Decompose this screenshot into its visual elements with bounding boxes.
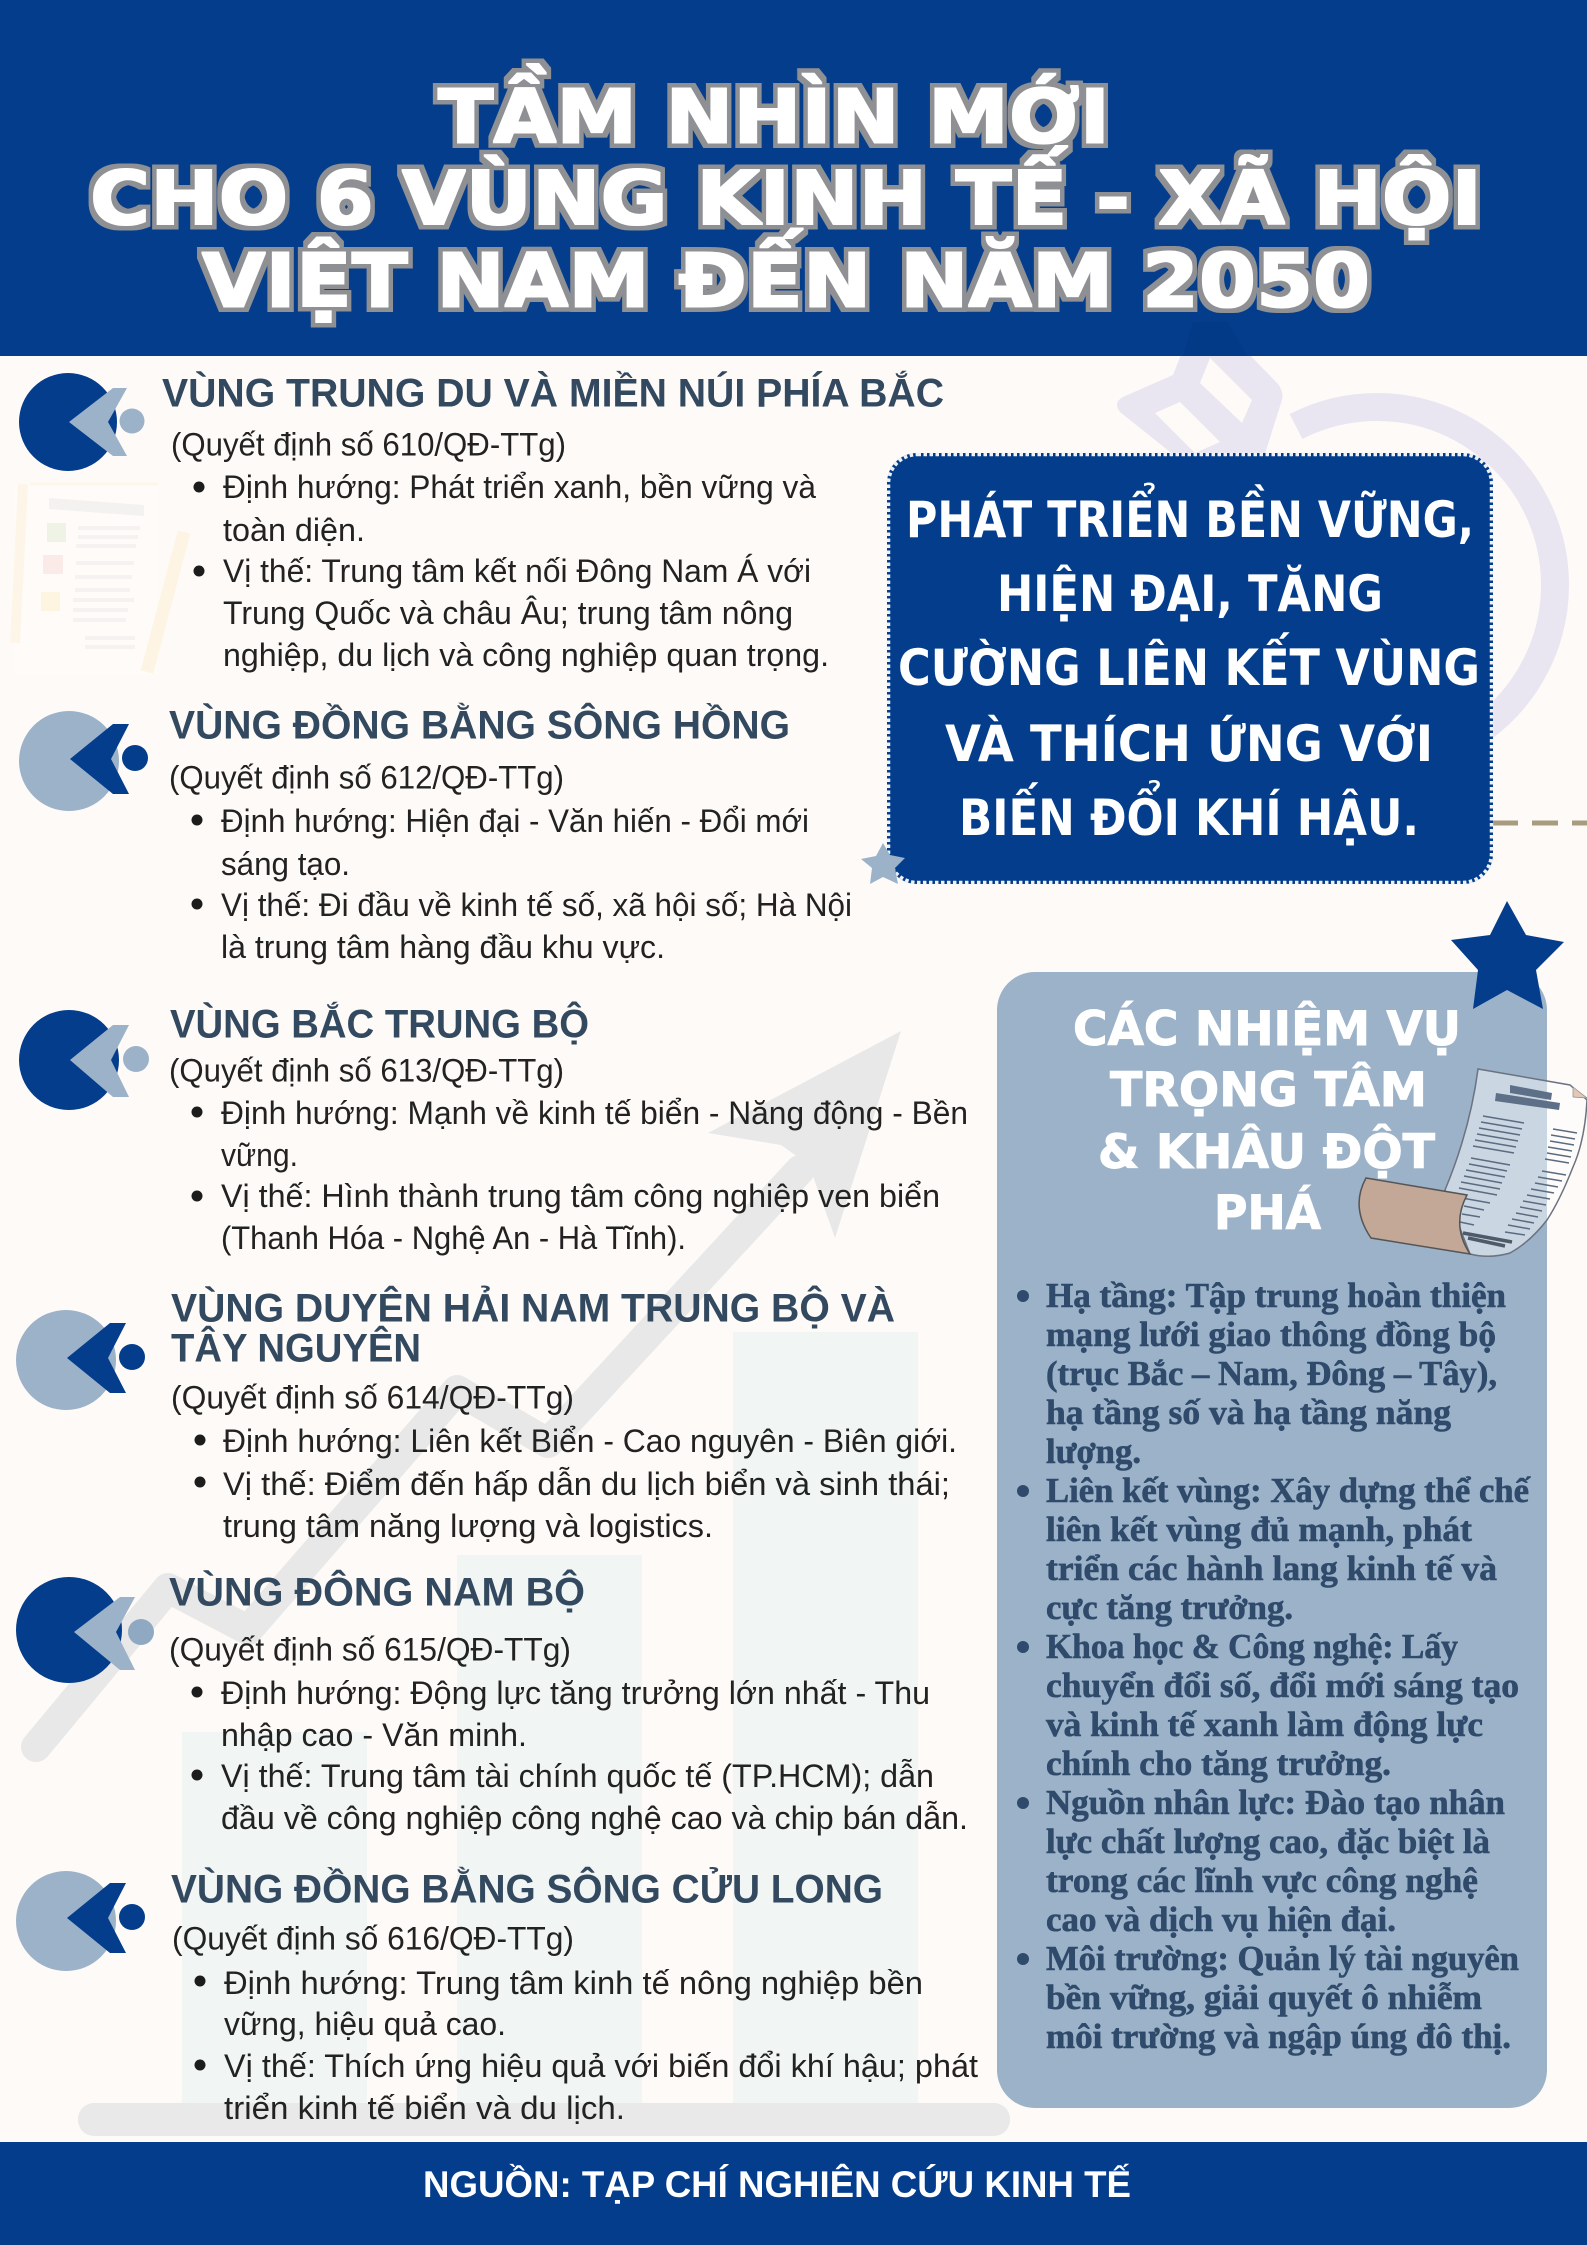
bullet list: section 6: triển kinh tế biển và du lịch.	[224, 2090, 625, 2126]
panel: key tasks	[997, 972, 1587, 2108]
bullet list: section 3	[192, 1095, 968, 1256]
bullet list: section 2	[192, 803, 852, 965]
task list	[1017, 1276, 1531, 2056]
bullet list: section 3: vững.	[221, 1137, 298, 1173]
decision reference: section 4: (Quyết định số 614/QĐ-TTg)	[171, 1380, 574, 1416]
dashed connector	[1492, 820, 1587, 826]
task list: chính cho tăng trưởng.	[1046, 1744, 1391, 1783]
bullet list: section 5	[192, 1675, 968, 1836]
section 6: Đồng bằng sông Cửu Long	[16, 1866, 978, 2126]
task list: (trục Bắc – Nam, Đông – Tây),	[1046, 1354, 1497, 1393]
decision reference: section 1: (Quyết định số 610/QĐ-TTg)	[171, 426, 566, 462]
task list: môi trường và ngập úng đô thị.	[1046, 2017, 1511, 2056]
decision reference: section 2: (Quyết định số 612/QĐ-TTg)	[169, 760, 564, 796]
section 2: Đồng bằng sông Hồng	[19, 702, 852, 965]
bullet list: section 2: là trung tâm hàng đầu khu vực.	[221, 929, 665, 965]
background illustration: target ring and pencil	[1117, 352, 1555, 729]
task list: mạng lưới giao thông đồng bộ	[1046, 1315, 1496, 1354]
header band	[0, 0, 1587, 356]
heading: section 6: VÙNG ĐỒNG BẰNG SÔNG CỬU LONG	[171, 1866, 883, 1912]
decision reference: section 3: (Quyết định số 613/QĐ-TTg)	[169, 1052, 564, 1088]
title: CHO 6 VÙNG KINH TẾ - XÃ HỘI	[90, 145, 1482, 242]
icon: section 5 marker	[16, 1577, 154, 1683]
heading: section 1: VÙNG TRUNG DU VÀ MIỀN NÚI PHÍA BẮC	[162, 370, 944, 416]
footer band	[0, 2142, 1587, 2245]
bullet list: section 4: Định hướng: Liên kết Biển - Cao nguyên - Biên giới.	[223, 1423, 957, 1459]
callout: core vision: BIẾN ĐỔI KHÍ HẬU.	[959, 780, 1419, 847]
task list: cao và dịch vụ hiện đại.	[1046, 1900, 1396, 1939]
icon: section 3 marker	[19, 1010, 149, 1110]
icon: section 4 marker	[16, 1310, 145, 1410]
task list: hạ tầng số và hạ tầng năng	[1046, 1393, 1451, 1432]
heading: section 4: VÙNG DUYÊN HẢI NAM TRUNG BỘ VÀ	[171, 1284, 895, 1330]
bullet list: section 4: trung tâm năng lượng và logistics.	[223, 1508, 713, 1544]
task list: cực tăng trưởng.	[1046, 1588, 1293, 1627]
task list: Môi trường: Quản lý tài nguyên	[1046, 1939, 1519, 1978]
bullet list: section 1: nghiệp, du lịch và công nghiệp quan trọng.	[223, 637, 829, 673]
section 1: Trung du và miền núi phía Bắc	[19, 370, 944, 673]
bullet list: section 1: Định hướng: Phát triển xanh, bền vững và	[223, 469, 816, 505]
callout: core vision: VÀ THÍCH ỨNG VỚI	[945, 714, 1433, 773]
callout: core vision: CƯỜNG LIÊN KẾT VÙNG	[898, 632, 1480, 697]
bullet list: section 2: sáng tạo.	[221, 846, 350, 882]
decision reference: section 6: (Quyết định số 616/QĐ-TTg)	[172, 1920, 574, 1956]
bullet list: section 6: vững, hiệu quả cao.	[224, 2006, 506, 2042]
bullet list: section 5: Vị thế: Trung tâm tài chính quốc tế (TP.HCM); dẫn	[221, 1758, 934, 1794]
task list: Hạ tầng: Tập trung hoàn thiện	[1046, 1276, 1506, 1315]
bullet list: section 3: (Thanh Hóa - Nghệ An - Hà Tĩnh).	[221, 1220, 686, 1256]
heading: section 3: VÙNG BẮC TRUNG BỘ	[170, 1000, 589, 1046]
icon: small star	[861, 843, 905, 884]
heading: section 4	[171, 1284, 895, 1370]
panel heading: TRỌNG TÂM	[1110, 1063, 1427, 1118]
heading: section 2: VÙNG ĐỒNG BẰNG SÔNG HỒNG	[169, 702, 790, 748]
section 5: Đông Nam Bộ	[16, 1568, 968, 1836]
task list: Nguồn nhân lực: Đào tạo nhân	[1046, 1783, 1505, 1822]
heading: section 4: TÂY NGUYÊN	[171, 1324, 421, 1370]
title: VIỆT NAM ĐẾN NĂM 2050	[202, 228, 1370, 324]
bullet list: section 5: đầu về công nghiệp công nghệ cao và chip bán dẫn.	[221, 1800, 968, 1836]
callout: core vision: PHÁT TRIỂN BỀN VỮNG,	[906, 482, 1474, 549]
callout: core vision: HIỆN ĐẠI, TĂNG	[997, 564, 1383, 623]
task list: lượng.	[1046, 1432, 1141, 1471]
background chart: baseline	[78, 2103, 1010, 2136]
icon: section 6 marker	[16, 1871, 145, 1971]
panel heading: & KHÂU ĐỘT	[1098, 1125, 1435, 1180]
bullet list: section 6: Vị thế: Thích ứng hiệu quả với biến đổi khí hậu; phát	[224, 2048, 978, 2084]
task list: trong các lĩnh vực công nghệ	[1046, 1861, 1478, 1900]
title: TẦM NHÌN MỚI	[438, 64, 1110, 160]
section 3: Bắc Trung Bộ	[19, 1000, 968, 1256]
panel heading: CÁC NHIỆM VỤ	[1073, 1002, 1461, 1057]
task list: bền vững, giải quyết ô nhiễm	[1046, 1978, 1482, 2017]
task list: và kinh tế xanh làm động lực	[1046, 1705, 1483, 1744]
bullet list: section 4: Vị thế: Điểm đến hấp dẫn du lịch biển và sinh thái;	[223, 1466, 950, 1502]
icon: paper scroll	[1359, 1069, 1587, 1256]
bullet list: section 2: Vị thế: Đi đầu về kinh tế số, xã hội số; Hà Nội	[221, 887, 852, 923]
task list: liên kết vùng đủ mạnh, phát	[1046, 1510, 1472, 1549]
callout: core vision	[887, 453, 1493, 884]
task list: triển các hành lang kinh tế và	[1046, 1549, 1497, 1588]
icon: section 1 marker	[19, 373, 144, 471]
task list: chuyển đổi số, đổi mới sáng tạo	[1046, 1666, 1519, 1705]
task list: Khoa học & Công nghệ: Lấy	[1046, 1627, 1458, 1666]
decision reference: section 5: (Quyết định số 615/QĐ-TTg)	[169, 1632, 571, 1668]
bullet list: section 3: Định hướng: Mạnh về kinh tế biển - Năng động - Bền	[221, 1095, 968, 1131]
panel heading	[1073, 1002, 1461, 1241]
bullet list: section 5: nhập cao - Văn minh.	[221, 1717, 527, 1753]
task list: Liên kết vùng: Xây dựng thể chế	[1046, 1471, 1531, 1510]
background chart: bars	[182, 1332, 918, 2107]
bullet list: section 1	[194, 469, 829, 673]
panel heading: PHÁ	[1214, 1186, 1322, 1241]
bullet list: section 6	[194, 1965, 978, 2126]
background illustration: faded document and pencil	[15, 484, 184, 674]
background chart: rising arrow	[36, 1031, 901, 1747]
icon: section 2 marker	[19, 711, 148, 811]
task list: lực chất lượng cao, đặc biệt là	[1046, 1822, 1490, 1861]
heading: section 5: VÙNG ĐÔNG NAM BỘ	[169, 1568, 585, 1614]
bullet list: section 3: Vị thế: Hình thành trung tâm công nghiệp ven biển	[221, 1178, 940, 1214]
source line: NGUỒN: TẠP CHÍ NGHIÊN CỨU KINH TẾ	[423, 2163, 1131, 2205]
title	[90, 64, 1482, 324]
bullet list: section 6: Định hướng: Trung tâm kinh tế nông nghiệp bền	[224, 1965, 923, 2001]
bullet list: section 1: Trung Quốc và châu Âu; trung tâm nông	[223, 595, 793, 631]
bullet list: section 1: toàn diện.	[223, 512, 365, 548]
bullet list: section 5: Định hướng: Động lực tăng trưởng lớn nhất - Thu	[221, 1675, 930, 1711]
bullet list: section 4	[194, 1423, 957, 1544]
bullet list: section 1: Vị thế: Trung tâm kết nối Đông Nam Á với	[223, 553, 811, 589]
section 4: Duyên hải Nam Trung Bộ và Tây Nguyên	[16, 1284, 957, 1544]
icon: large star	[1451, 901, 1564, 1009]
bullet list: section 2: Định hướng: Hiện đại - Văn hiến - Đổi mới	[221, 803, 809, 839]
